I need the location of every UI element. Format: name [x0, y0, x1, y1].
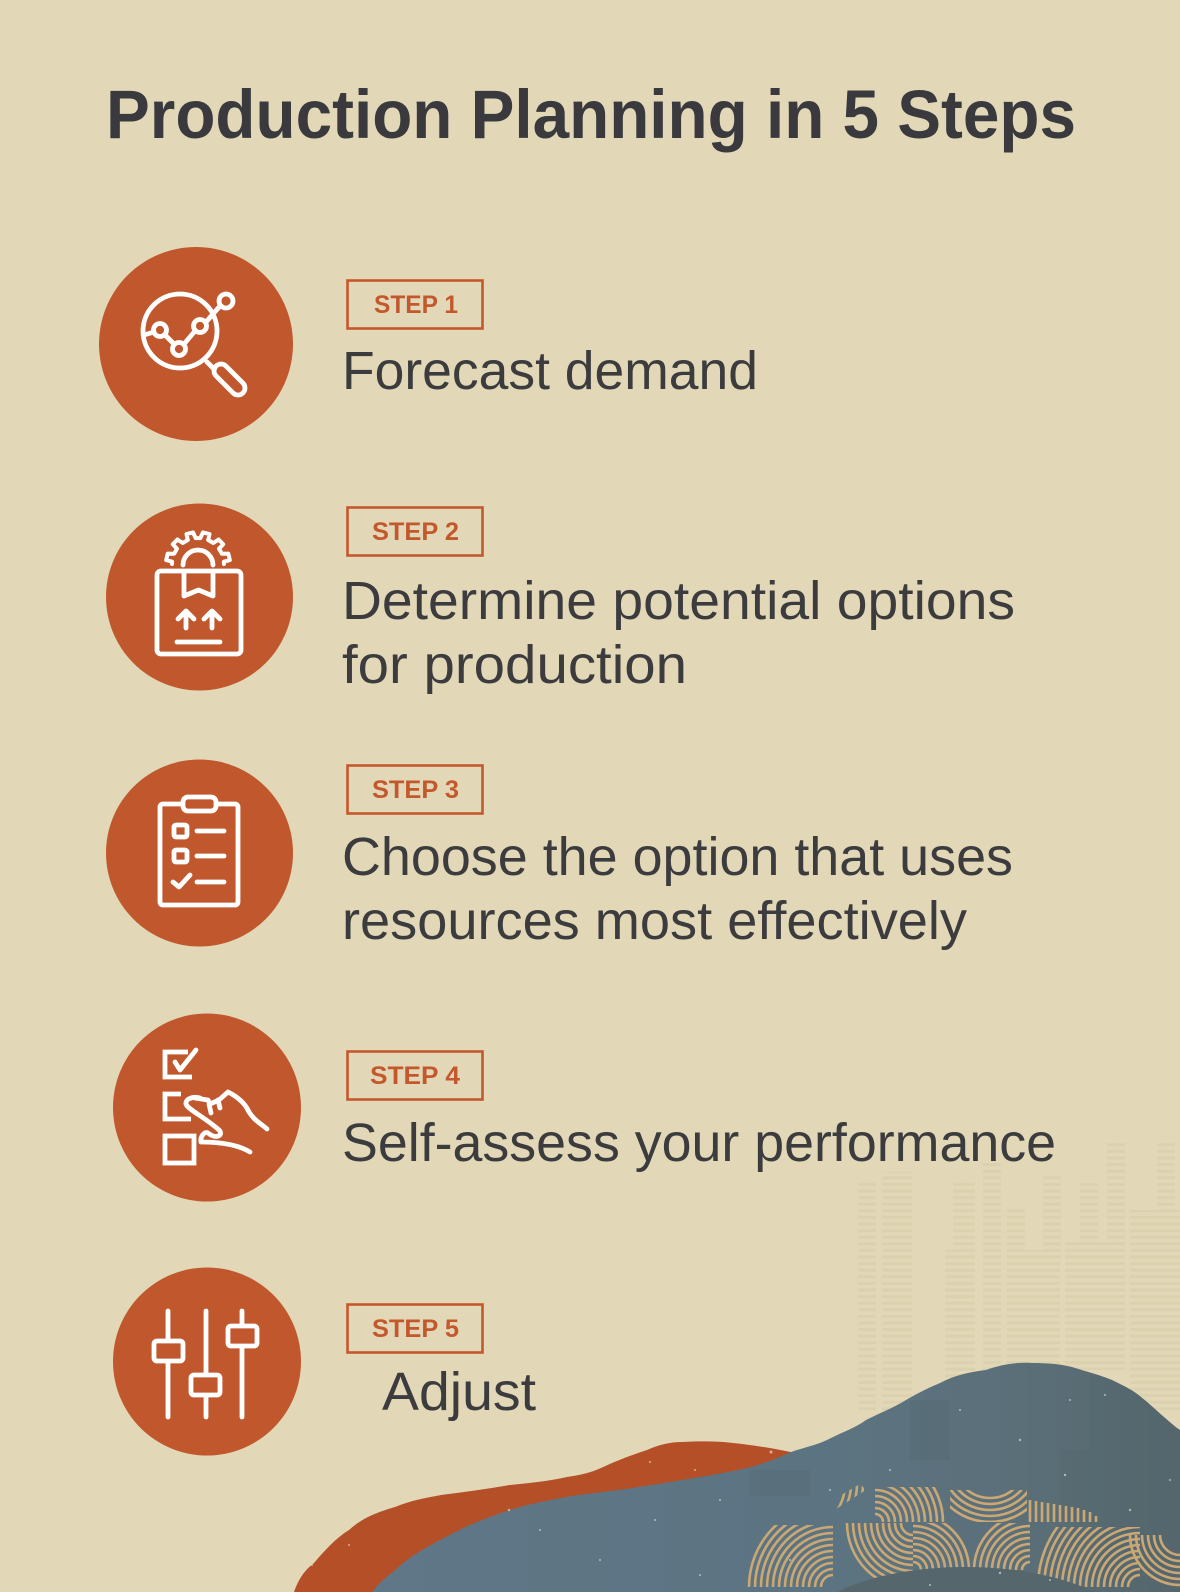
darker patches [1098, 1375, 1180, 1430]
blue hill [372, 1363, 1180, 1592]
text: choose the option: Choose the option that uses [342, 827, 1013, 887]
faint dashed texture [858, 1143, 1180, 1410]
badge: step 5 [348, 1304, 482, 1352]
text: self-assess: Self-assess your performance [342, 1113, 1056, 1173]
text: choose the option: resources most effectively [342, 891, 967, 951]
text: adjust: Adjust [382, 1362, 536, 1422]
fingerprint arc pattern [748, 1485, 1180, 1587]
icon: hand ticking checklist [113, 1014, 301, 1202]
badge: step 2: STEP 2 [372, 518, 459, 546]
icon: clipboard checklist [106, 760, 293, 946]
badge: step 2 [348, 508, 482, 556]
badge: step 1 [348, 280, 482, 328]
badge: step 3: STEP 3 [372, 776, 459, 804]
icon: sliders [113, 1268, 301, 1456]
icon: box and gear [106, 504, 293, 690]
dark dome [838, 1567, 1095, 1592]
badge: step 4: STEP 4 [370, 1062, 460, 1090]
badge: step 5: STEP 5 [372, 1315, 459, 1343]
step 4 [113, 1014, 1056, 1202]
icon: magnifier with trend line [99, 247, 293, 441]
text: determine options [342, 571, 1015, 695]
step 3 [106, 760, 1013, 951]
badge: step 1: STEP 1 [374, 291, 458, 319]
step 1 [99, 247, 758, 441]
illustration: mountains [294, 1363, 1180, 1592]
text: choose the option [342, 827, 1013, 951]
step 2 [106, 504, 1015, 695]
text: determine options: Determine potential options [342, 571, 1015, 631]
speckles [311, 1394, 1171, 1586]
badge: step 4 [348, 1052, 482, 1100]
badge: step 3 [348, 766, 482, 814]
text: forecast demand: Forecast demand [342, 341, 758, 401]
step 5 [113, 1268, 536, 1456]
text: determine options: for production [342, 635, 687, 695]
title: Production Planning in 5 Steps [106, 76, 1076, 153]
red hill [294, 1441, 800, 1592]
